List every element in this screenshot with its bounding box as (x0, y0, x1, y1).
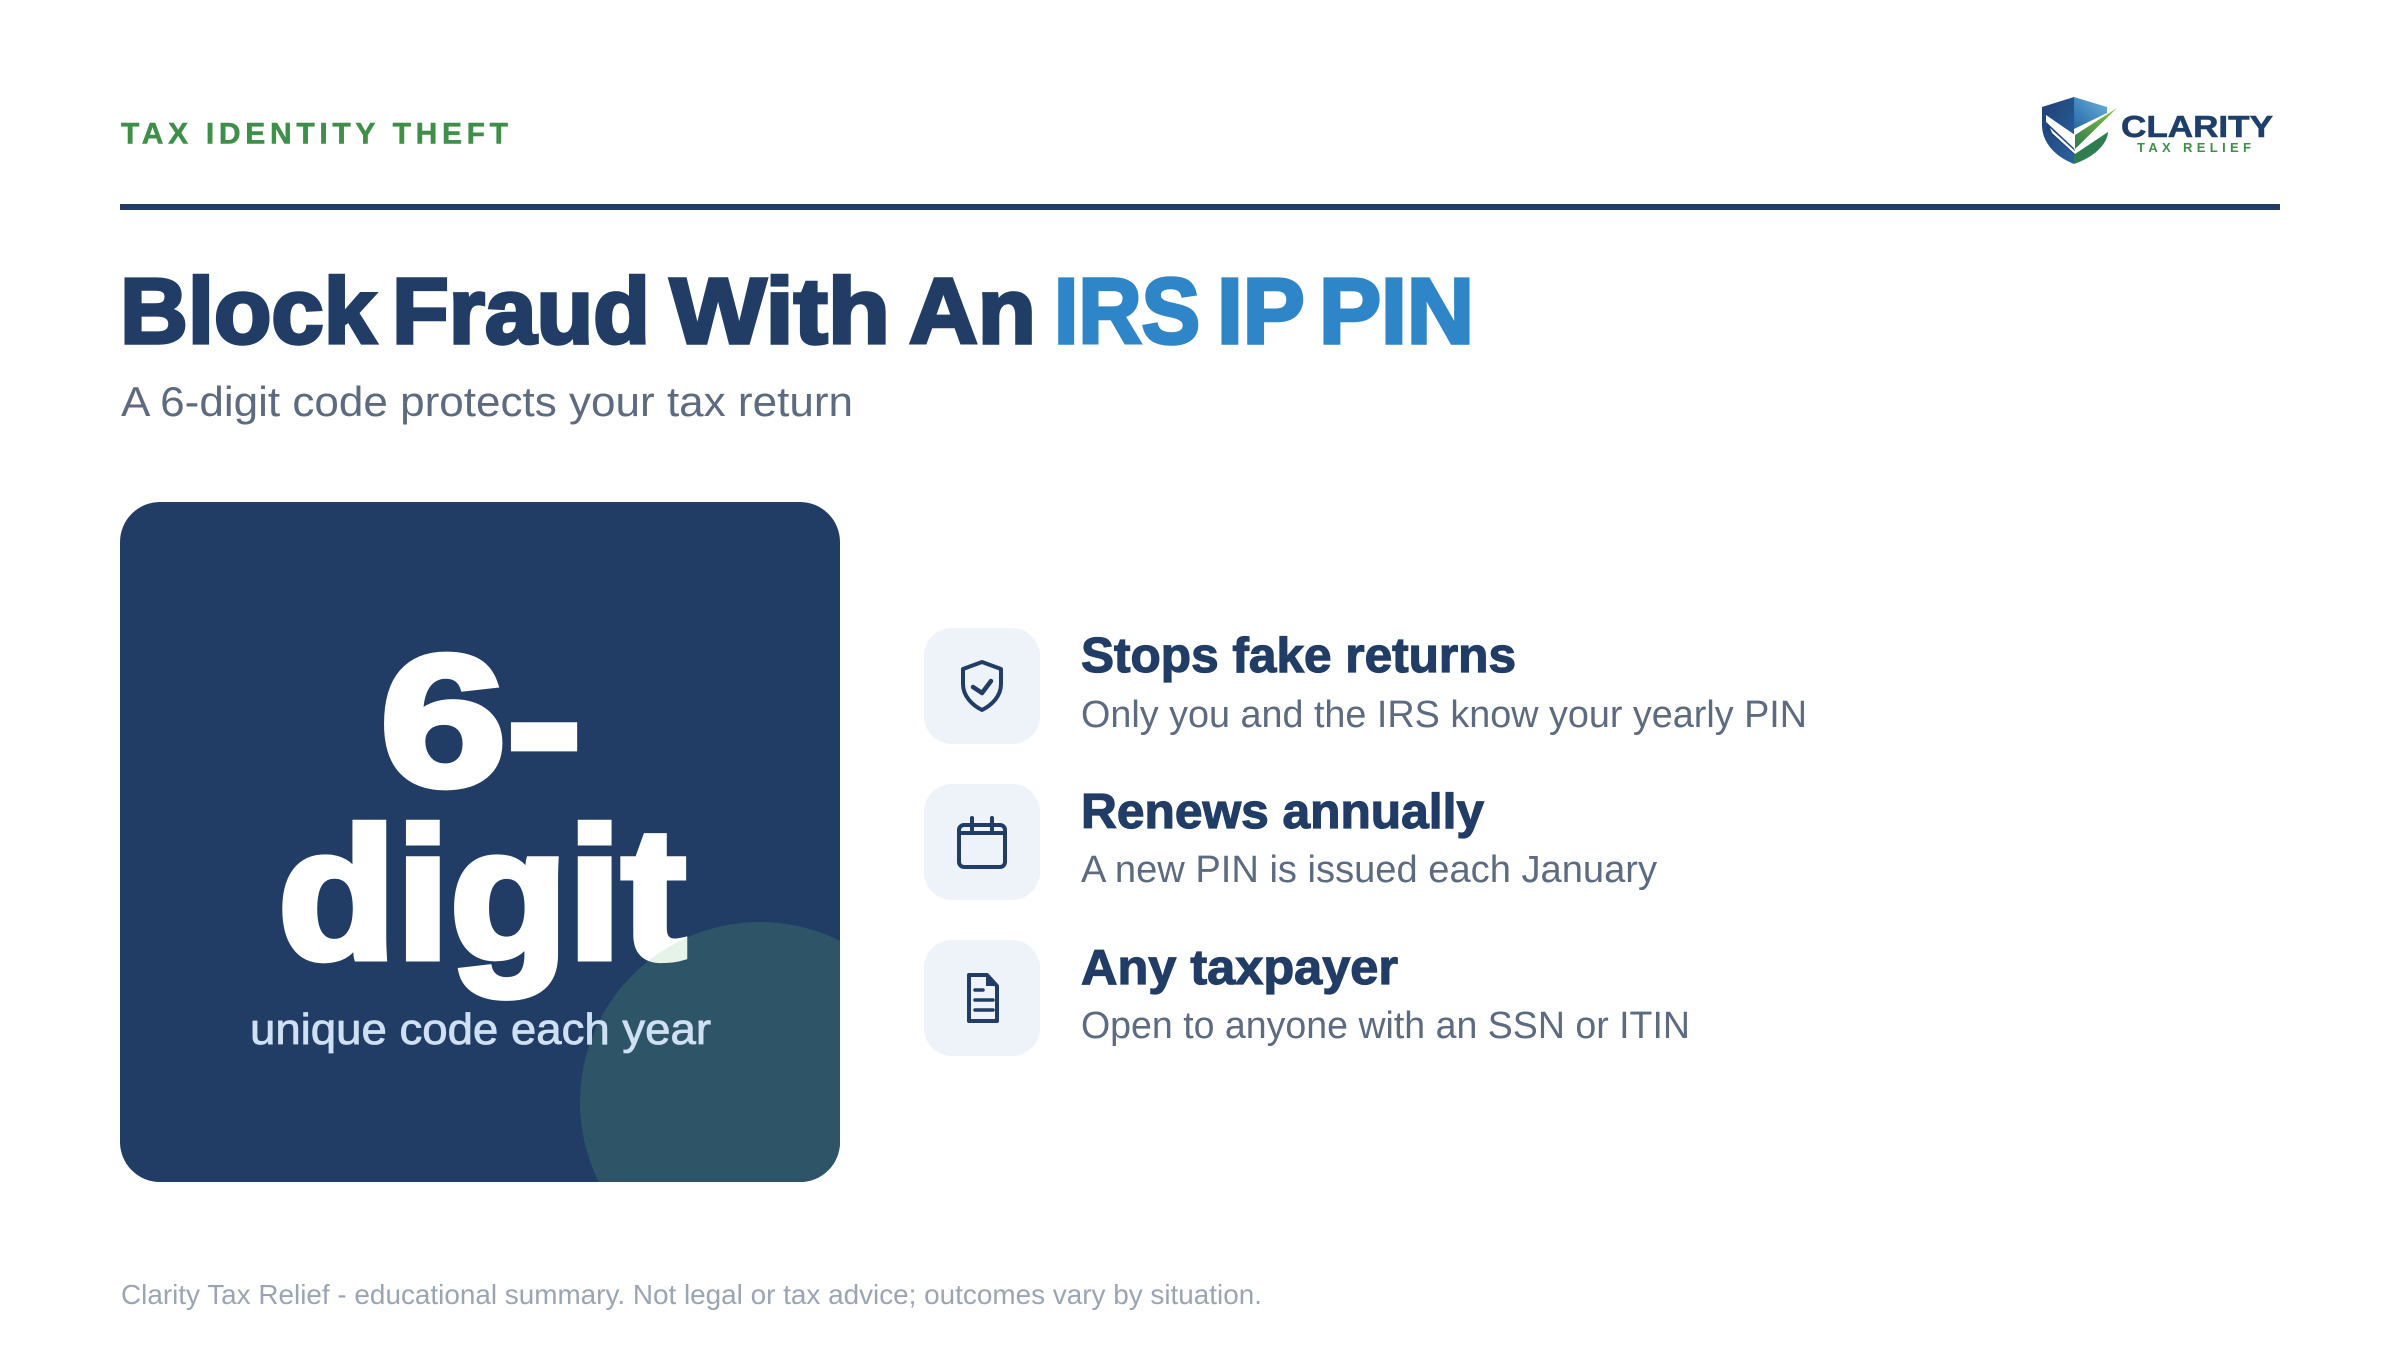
decorative green circle (580, 922, 840, 1182)
big stat: 6-digit (278, 618, 686, 998)
title: With (670, 259, 890, 363)
subtitle: A 6-digit code protects your tax return (121, 378, 853, 425)
header rule (120, 204, 2280, 210)
title (120, 259, 1474, 363)
item: stops fake returns (924, 628, 1807, 744)
logo wordmark: CLARITY (2121, 109, 2273, 144)
title: Block (120, 259, 376, 363)
item heading: Renews annually (1081, 785, 1484, 839)
title: IP (1217, 259, 1303, 363)
title: IRS (1054, 259, 1200, 363)
icon: shield check (924, 628, 1040, 744)
item: renews annually (924, 784, 1657, 900)
item description: A new PIN is issued each January (1081, 849, 1657, 891)
title: Fraud (392, 259, 650, 363)
logo tagline: TAX RELIEF (2137, 140, 2251, 155)
item: any taxpayer (924, 940, 1690, 1056)
big stat: 6-digit: 6- (380, 618, 582, 825)
item heading: Any taxpayer (1081, 941, 1398, 995)
big stat: 6-digit: digit (278, 791, 686, 998)
icon: document (924, 940, 1040, 1056)
item description: Only you and the IRS know your yearly PIN (1081, 694, 1807, 736)
eyebrow: tax identity theft: TAX IDENTITY THEFT (121, 118, 508, 150)
icon: calendar (924, 784, 1040, 900)
item heading: Stops fake returns (1081, 629, 1516, 683)
footer disclaimer: Clarity Tax Relief - educational summary. Not legal or tax advice; outcomes vary by situation. (121, 1279, 1262, 1310)
title: PIN (1319, 259, 1474, 363)
item description: Open to anyone with an SSN or ITIN (1081, 1005, 1690, 1047)
title: An (909, 259, 1036, 363)
stat caption: unique code each year (250, 1005, 711, 1054)
logo: Clarity Tax Relief (2042, 97, 2273, 164)
icon: logo shield (2042, 97, 2117, 164)
panel: 6-digit stat card (120, 502, 840, 1182)
